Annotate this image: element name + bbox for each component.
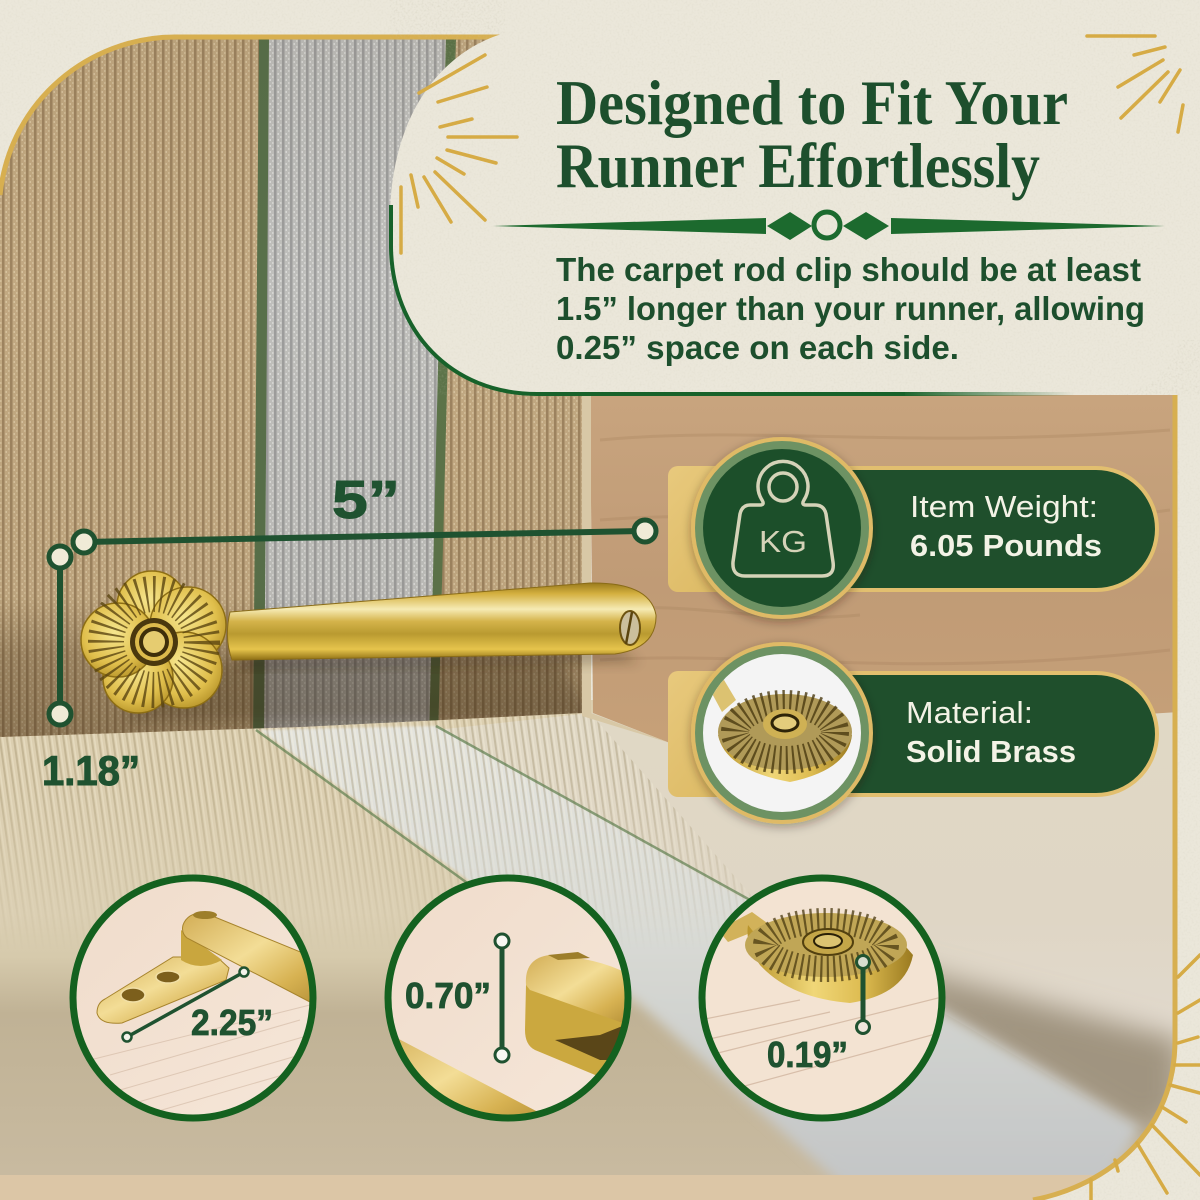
carpet fold strip (580, 395, 670, 743)
gold tab (668, 671, 778, 797)
lower tread floor (0, 700, 1200, 1200)
rod (227, 583, 656, 660)
bottom beige strip (0, 1175, 1200, 1200)
green pill (762, 468, 1157, 590)
circle detail: 0.19 inch thickness (700, 878, 950, 1118)
sunburst: header right (1087, 36, 1183, 132)
dimension line (495, 934, 509, 1062)
rod (182, 914, 310, 1002)
header green edge line (391, 205, 1075, 394)
wood step (590, 395, 1180, 743)
material text: Material: (906, 695, 1033, 730)
flower face (745, 913, 907, 977)
ring (388, 878, 628, 1118)
icon: kg weight (733, 461, 833, 576)
title: Runner Effortlessly (556, 130, 1040, 201)
sunburst: header left (401, 55, 517, 253)
green pill (762, 673, 1157, 795)
material text (906, 695, 1076, 769)
base plate (97, 957, 229, 1023)
label: 0.70” (405, 975, 491, 1016)
description text: 1.5” longer than your runner, allowing (556, 290, 1145, 327)
dimension: 5 inch width: 5” (332, 470, 400, 530)
description text (556, 251, 1145, 366)
ring (73, 878, 313, 1118)
label: 0.19” (767, 1034, 848, 1075)
title (556, 67, 1068, 201)
badge: item weight (668, 437, 1157, 619)
screw (620, 611, 640, 645)
flower rim (748, 925, 913, 1003)
weight text: Item Weight: (910, 489, 1098, 524)
label: 2.25” (191, 1002, 273, 1043)
gold tab (668, 466, 778, 592)
icon: kg weight: KG (759, 524, 807, 559)
runner white stripe, blurred lower part (588, 904, 1143, 1175)
weight icon circle (691, 437, 873, 619)
flower rosette (81, 571, 226, 713)
stem (723, 912, 767, 942)
right side of tread (444, 712, 1172, 1070)
carpet on vertical riser (0, 37, 600, 742)
material photo circle (691, 642, 873, 824)
thin green stripe lines on tread (256, 726, 750, 900)
sunburst: bottom right (1091, 955, 1200, 1200)
brass clip: rod and flower (81, 571, 656, 713)
description text: 0.25” space on each side. (556, 329, 959, 366)
tread weave texture (0, 714, 751, 916)
lower rod (399, 1039, 536, 1114)
title: Designed to Fit Your (556, 67, 1068, 138)
fold shadow on tread (940, 960, 1172, 1138)
clip top (526, 955, 630, 1025)
dimension: 1.18 inch height (42, 546, 140, 794)
dimension: 5 inch width (73, 470, 656, 553)
material text: Solid Brass (906, 734, 1076, 769)
dimension line (122, 968, 248, 1042)
runner white stripe, sharp upper part (261, 725, 747, 908)
dimension line (856, 956, 870, 1034)
rosette photo (708, 680, 852, 782)
post (181, 930, 222, 966)
weight text (910, 489, 1102, 563)
weight text: 6.05 Pounds (910, 528, 1102, 563)
description text: The carpet rod clip should be at least (556, 251, 1141, 288)
clip body (525, 985, 626, 1077)
header paper panel (390, 0, 1200, 395)
rod shadow (240, 650, 640, 670)
ring (702, 878, 942, 1118)
badge: material (668, 642, 1157, 824)
dimension: 1.18 inch height: 1.18” (42, 747, 140, 794)
circle detail: 2.25 inch base plate (73, 878, 320, 1118)
ornamental divider (493, 212, 1165, 240)
circle detail: 0.70 inch height (380, 878, 630, 1130)
